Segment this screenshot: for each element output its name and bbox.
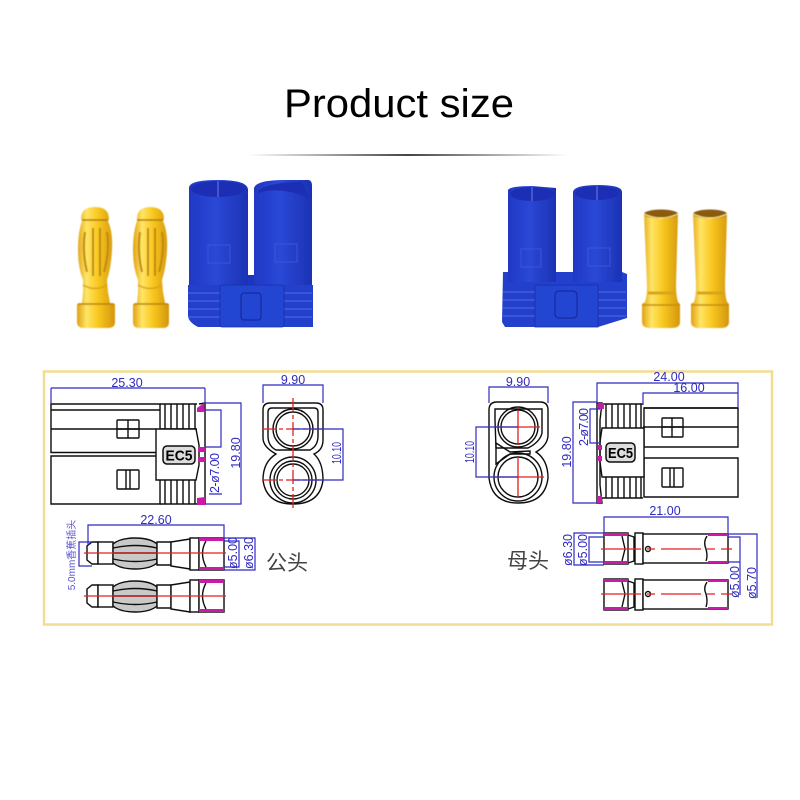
dimension: 19.80 left: 19.80 <box>229 437 243 469</box>
drawing: female sockets <box>601 533 732 610</box>
icon: terminal square plus <box>117 420 139 438</box>
drawing: female housing side view <box>597 403 738 503</box>
dimension: 2-ø7.00 right <box>577 408 600 446</box>
female socket lower <box>601 579 732 610</box>
dimension: 9.90 right <box>489 375 548 403</box>
drawing: male pins <box>84 538 226 612</box>
photo: blue male housing <box>188 180 313 327</box>
dimension: 16.00: 16.00 <box>673 381 705 395</box>
dimension: male pin diameters: ø6.30 <box>242 537 256 569</box>
drawing: male housing side view <box>51 403 205 505</box>
dimension: 24.00: 24.00 <box>653 370 685 384</box>
dimension: 9.90 left <box>263 373 323 403</box>
label: male connector: 公头 <box>266 552 308 575</box>
dimension: 10.10 left <box>293 429 344 480</box>
dimension: female socket left diameters: ø6.30 <box>561 534 575 566</box>
icon: female socket left <box>642 210 680 328</box>
dimension: male pin diameters: ø5.00 <box>226 537 240 569</box>
photo: male bullet pins <box>77 207 169 328</box>
icon: terminal square slot <box>662 468 683 487</box>
title: Product size <box>284 82 514 126</box>
dimension: 25.30 <box>51 376 205 404</box>
dimension: 25.30: 25.30 <box>111 376 143 390</box>
photo: blue female housing <box>502 185 627 327</box>
female socket upper <box>601 533 732 564</box>
dimension: 22.60 <box>88 513 224 545</box>
dimension: 10.10 left: 10.10 <box>330 442 344 464</box>
dimension: 5.0mm banana plug: 5.0mm香蕉插头 <box>65 520 78 590</box>
dimension: 2-ø7.00 right: 2-ø7.00 <box>577 408 591 446</box>
drawing: male housing front view <box>262 398 324 510</box>
label: EC5 badge: EC5 <box>608 445 633 462</box>
dimension: 9.90 right: 9.90 <box>506 375 530 389</box>
dimension: female socket right diameters <box>728 534 759 599</box>
icon: terminal square slot <box>117 470 139 489</box>
panel: technical drawings frame <box>44 372 772 624</box>
dimension: 10.10 right <box>463 427 518 477</box>
label: EC5 badge: EC5 <box>166 448 192 464</box>
dimension: female socket left diameters <box>561 533 604 566</box>
title divider <box>248 154 568 156</box>
drawing: female housing front view <box>489 402 548 503</box>
dimension: 16.00 <box>643 381 738 405</box>
dimension: 2-ø7.00 left <box>205 410 222 494</box>
dimension: 24.00 <box>597 370 738 408</box>
male pin lower <box>84 580 226 612</box>
dimension: 22.60: 22.60 <box>140 513 172 527</box>
dimension: female socket left diameters: ø5.00 <box>576 534 590 566</box>
icon: terminal square plus <box>662 418 683 437</box>
male pin upper <box>84 538 226 570</box>
dimension: 5.0mm banana plug <box>65 520 92 590</box>
dimension: 21.00: 21.00 <box>649 504 681 518</box>
dimension: 10.10 right: 10.10 <box>463 441 477 463</box>
icon: female socket right <box>691 210 729 328</box>
dimension: 19.80 right <box>560 402 597 503</box>
dimension: male pin diameters <box>224 537 256 570</box>
dimension: 19.80 left <box>205 403 243 504</box>
icon: male pin left <box>77 207 115 328</box>
dimension: 9.90 left: 9.90 <box>281 373 305 387</box>
dimension: 2-ø7.00 left: 2-ø7.00 <box>208 453 222 493</box>
dimension: 21.00 <box>604 504 728 533</box>
photo: female gold sockets <box>642 210 729 328</box>
dimension: female socket right diameters: ø5.70 <box>745 567 759 599</box>
dimension: female socket right diameters: ø5.00 <box>728 566 742 598</box>
label: female connector: 母头 <box>507 550 549 573</box>
dimension: 19.80 right: 19.80 <box>560 436 574 468</box>
icon: male pin right <box>133 207 169 328</box>
